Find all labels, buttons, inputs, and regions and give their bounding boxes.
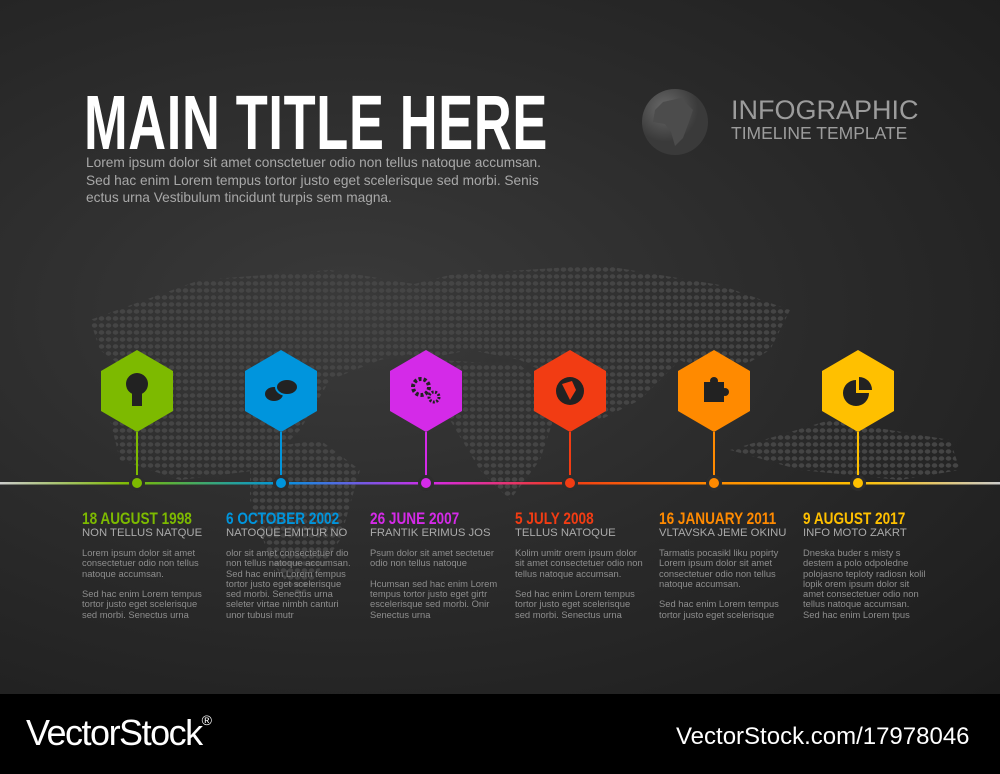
marker 3: gears [390,350,462,491]
entry 5 [659,509,786,620]
watermark url: VectorStock.com/17978046 [676,723,970,750]
entry 1 [82,509,202,620]
text: Lorem ipsum dolor sit amet consectetuer odio non tellus natoque accumsan. [82,547,199,579]
entry 2 [226,509,351,620]
text: NON TELLUS NATQUE [82,527,202,539]
entry 6 [803,509,925,620]
text: Dneska buder s misty s destem a polo odpoledne polojasno teploty radiosn kolil lopik orem ipsum dolor sit amet consectetuer odio non tellus natoque accumsan. Sed hac enim Lorem tpus [803,547,925,620]
text: Hcumsan sed hac enim Lorem tempus tortor justo eget girtr escelerisque sed morbi. Onir Senectus urna [370,578,497,620]
text: Sed hac enim Lorem tempus tortor justo eget scelerisque [659,598,779,620]
intro text: ectus urna Vestibulum tincidunt turpis sem magna. [86,190,392,205]
intro text: Sed hac enim Lorem tempus tortor justo eget scelerisque sed morbi. Senis [86,172,539,188]
entry 3 [370,509,497,620]
text: 18 AUGUST 1998 [82,509,192,528]
intro text [86,155,541,205]
intro text: Lorem ipsum dolor sit amet consctetuer odio non tellus natoque accumsan. [86,155,541,170]
text: 9 AUGUST 2017 [803,509,905,528]
text: NATOQUE EMITUR NO [226,527,347,539]
marker 1: lightbulb [101,350,173,491]
subtitle: infographic timeline template: TIMELINE TEMPLATE [731,123,907,143]
text: 6 OCTOBER 2002 [226,509,339,528]
text: olor sit amet consectetuer dio non tellus natoque accumsan. Sed hac enim Lorem tempus tortor justo eget scelerisque sed morbi. Senectus urna seleter virtae nimbh canturi unor tubusi mutr [226,547,351,620]
text: VLTAVSKA JEME OKINU [659,527,786,539]
text: 26 JUNE 2007 [370,509,459,528]
icon: globe [642,89,708,155]
marker 6: pie chart [822,350,894,491]
watermark bar [0,694,1000,774]
text: Psum dolor sit amet sectetuer odio non tellus natoque [370,547,494,568]
marker 2: chat bubbles [245,350,317,491]
text: FRANTIK ERIMUS JOS [370,527,491,539]
subtitle: infographic timeline template: INFOGRAPHIC [731,95,919,125]
text: Sed hac enim Lorem tempus tortor justo eget scelerisque sed morbi. Senectus urna [82,588,202,620]
text: TELLUS NATOQUE [515,527,616,539]
text: Sed hac enim Lorem tempus tortor justo eget scelerisque sed morbi. Senectus urna [515,588,635,620]
marker 4: globe [534,350,606,491]
title: MAIN TITLE HERE [84,80,548,166]
hexagon markers [101,350,894,489]
marker 5: puzzle [678,350,750,491]
text: 16 JANUARY 2011 [659,509,776,528]
timeline line [0,482,1000,484]
text: INFO MOTO ZAKRT [803,527,907,539]
text: Kolim umitr orem ipsum dolor sit amet consectetuer odio non tellus natoque accumsan. [515,547,643,579]
subtitle: infographic timeline template [731,95,919,143]
text: Tarmatis pocasikl liku popirty Lorem ipsum dolor sit amet consectetuer odio non tellus natoque accumsan. [659,547,778,589]
text: 5 JULY 2008 [515,509,594,528]
watermark logo: VectorStock® [26,712,210,753]
entry 4 [515,509,643,620]
